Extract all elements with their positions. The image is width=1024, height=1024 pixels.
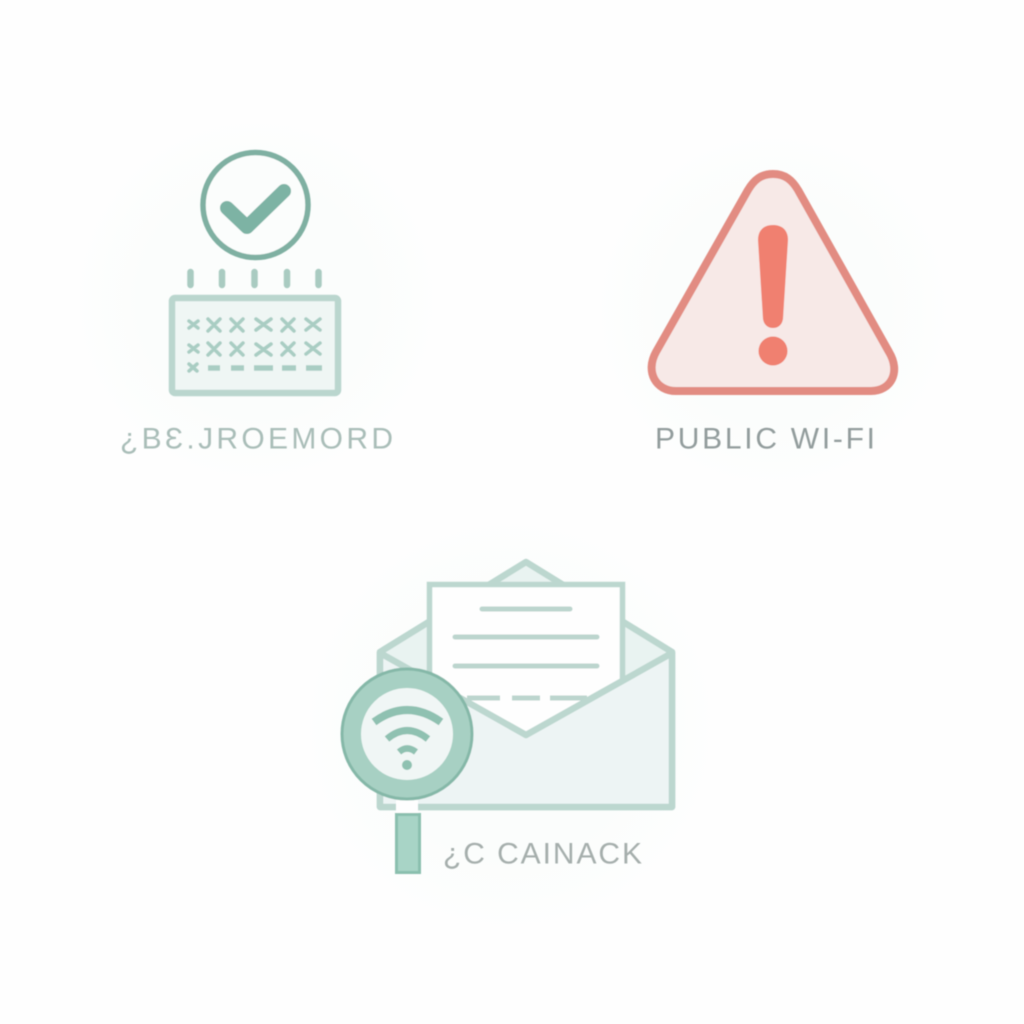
icon: letter paper bbox=[430, 584, 622, 734]
label: public wi-fi caption: PUBLIC WI-FI bbox=[655, 422, 875, 456]
icon: keyboard ticks bbox=[190, 272, 318, 285]
panel: email inspection bbox=[342, 562, 672, 872]
panel: public wi-fi warning bbox=[652, 174, 894, 456]
label: email caption: ¿C CAINACK bbox=[443, 838, 642, 870]
icon: calendar keyboard grid bbox=[172, 298, 338, 393]
icon: open envelope bbox=[380, 562, 672, 807]
label: password caption: ¿BƐ.JROEMORD bbox=[120, 422, 393, 456]
icon: magnifying glass with wi-fi bbox=[342, 669, 472, 872]
icon: warning triangle bbox=[652, 174, 894, 391]
icon: check mark in circle bbox=[203, 152, 308, 258]
icon: exclamation mark bbox=[758, 225, 788, 366]
panel: password item bbox=[120, 152, 393, 456]
